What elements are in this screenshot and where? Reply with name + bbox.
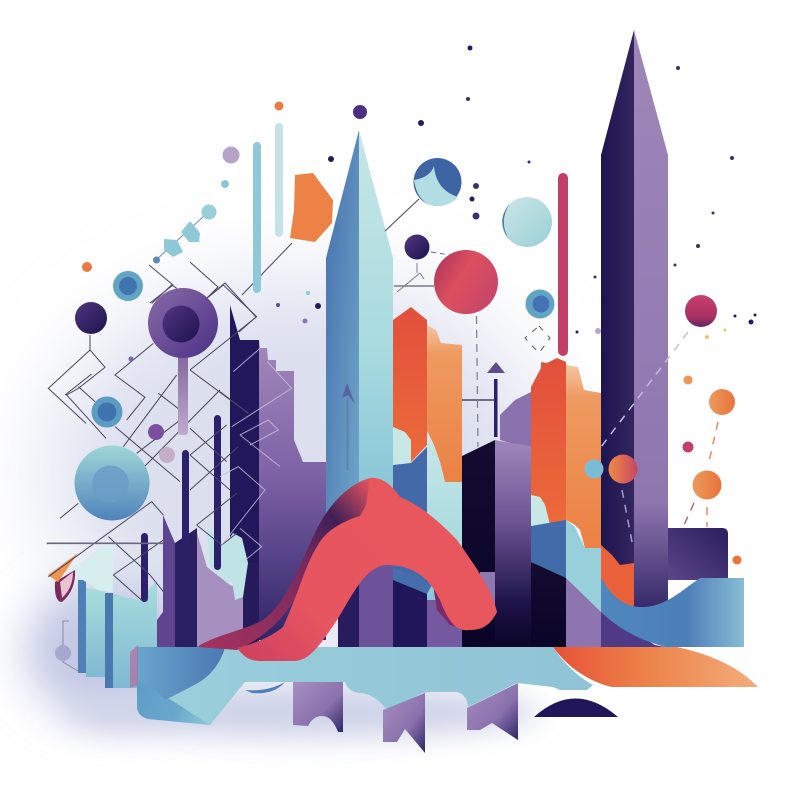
small pink tab left of band xyxy=(130,645,138,688)
columns beneath the red arch xyxy=(338,560,470,647)
lollipop lower left xyxy=(55,621,78,671)
blue and teal swoosh circle xyxy=(414,158,462,206)
purple circle with stem xyxy=(148,288,218,435)
connector lines above the purple circle xyxy=(149,199,419,332)
chain of teal shapes top left xyxy=(153,146,240,264)
blue, teal, black and lavender columns under block two xyxy=(531,520,665,647)
lavender and navy low towers xyxy=(157,515,259,647)
dashed connector lines xyxy=(601,332,718,547)
teal and pale vertical bars xyxy=(253,123,283,293)
blue wave at right xyxy=(601,578,744,647)
blue circle left xyxy=(92,396,122,428)
grid of thin connector lines xyxy=(47,285,257,602)
maroon and orange fragment far left xyxy=(48,553,78,602)
crimson vertical bar xyxy=(558,173,568,356)
arrow inside central spire xyxy=(342,383,355,470)
small blue swoosh under band xyxy=(245,682,285,693)
orange and crimson circles right xyxy=(682,376,742,564)
dark box beside obelisk xyxy=(668,528,728,580)
hanging purple piece three xyxy=(467,683,518,740)
red wave: dark fold xyxy=(197,478,390,650)
navy circle with dashes xyxy=(404,234,450,260)
orange polygon xyxy=(290,173,333,242)
orange block one xyxy=(393,307,462,482)
black and lavender columns xyxy=(462,392,531,647)
teal ground band xyxy=(137,647,593,725)
crimson circle right xyxy=(685,295,717,327)
orange wedge between obelisk columns xyxy=(601,545,634,608)
upper blue of band xyxy=(137,647,225,700)
pale connector lines over the purple tower xyxy=(220,348,292,562)
blue circle top left xyxy=(113,271,143,301)
navy vertical bars xyxy=(141,415,221,602)
central blue and teal spire xyxy=(326,130,393,560)
top dots xyxy=(274,46,756,334)
tiny yellow sparkles xyxy=(705,328,726,339)
small orange dot left xyxy=(82,262,92,272)
central upward arrow xyxy=(462,316,505,447)
teal buildings far left xyxy=(73,545,157,688)
red circle xyxy=(434,250,498,314)
navy dome xyxy=(534,698,618,717)
thin tripod connector xyxy=(394,263,434,292)
red wave: main ribbon xyxy=(237,478,497,661)
orange block two xyxy=(531,358,601,548)
navy circle with stem xyxy=(75,302,107,334)
orange lens shape xyxy=(553,647,758,687)
left stepped purple tower xyxy=(230,305,326,640)
lower blue of band xyxy=(137,660,210,725)
hanging purple piece two xyxy=(383,693,425,753)
teal and orange pair on obelisk xyxy=(584,454,638,484)
small purple and pink circles xyxy=(128,356,175,463)
tall dark and purple obelisk xyxy=(601,30,668,620)
large teal circle xyxy=(74,446,150,520)
pale teal circle xyxy=(502,197,552,247)
blue circle right xyxy=(526,290,554,318)
teal and blue lower steps of block one xyxy=(393,427,462,640)
hanging purple piece one xyxy=(293,682,343,732)
dashed diamond xyxy=(525,326,550,353)
